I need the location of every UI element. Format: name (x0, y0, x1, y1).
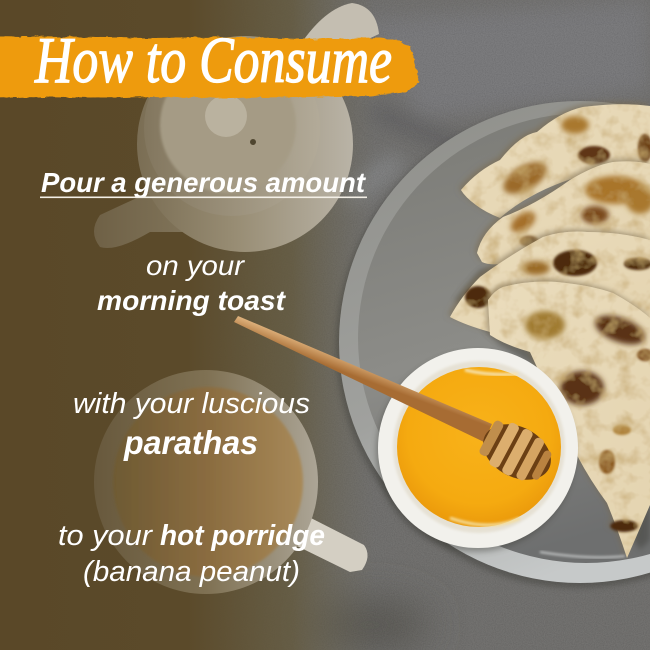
honey dipper (234, 316, 561, 491)
text: to your hot porridge (banana peanut) (58, 520, 325, 588)
brown overlay on left side (0, 0, 375, 650)
text: to your hot porridge (banana peanut): to your (58, 520, 153, 552)
honey bowl (376, 348, 578, 552)
heading: pour a generous amount: Pour a generous amount (41, 167, 367, 198)
text: with your luscious parathas: with your luscious (73, 388, 310, 420)
teapot handle (300, 3, 379, 50)
paratha slice 3 (450, 232, 650, 332)
text: on your morning toast: on your (146, 250, 246, 281)
title: How to Consume (34, 24, 392, 97)
text: with your luscious parathas (73, 388, 310, 461)
teapot (94, 3, 379, 252)
text: on your morning toast (97, 250, 287, 316)
title banner: orange brush stroke (0, 36, 419, 98)
text: with your luscious parathas: parathas (123, 424, 258, 461)
plate (336, 101, 650, 588)
paratha slice 2 (477, 161, 650, 264)
teapot body (137, 36, 353, 252)
paratha slice 4 (488, 282, 650, 558)
bowl (378, 348, 578, 548)
cup handle (295, 515, 368, 572)
honey (397, 367, 561, 527)
dipper handle (234, 316, 492, 442)
text: to your hot porridge (banana peanut): hot porridge (160, 520, 325, 552)
text: to your hot porridge (banana peanut): (banana peanut) (83, 556, 300, 588)
teapot spout (94, 178, 215, 248)
teapot knob (205, 95, 247, 137)
parathas (450, 104, 650, 558)
cup rim (94, 370, 318, 594)
paratha slice 1 (461, 104, 650, 218)
dipper head (473, 413, 561, 491)
text: on your morning toast: morning toast (97, 285, 287, 316)
tea (113, 387, 303, 577)
cup of tea (94, 370, 368, 594)
